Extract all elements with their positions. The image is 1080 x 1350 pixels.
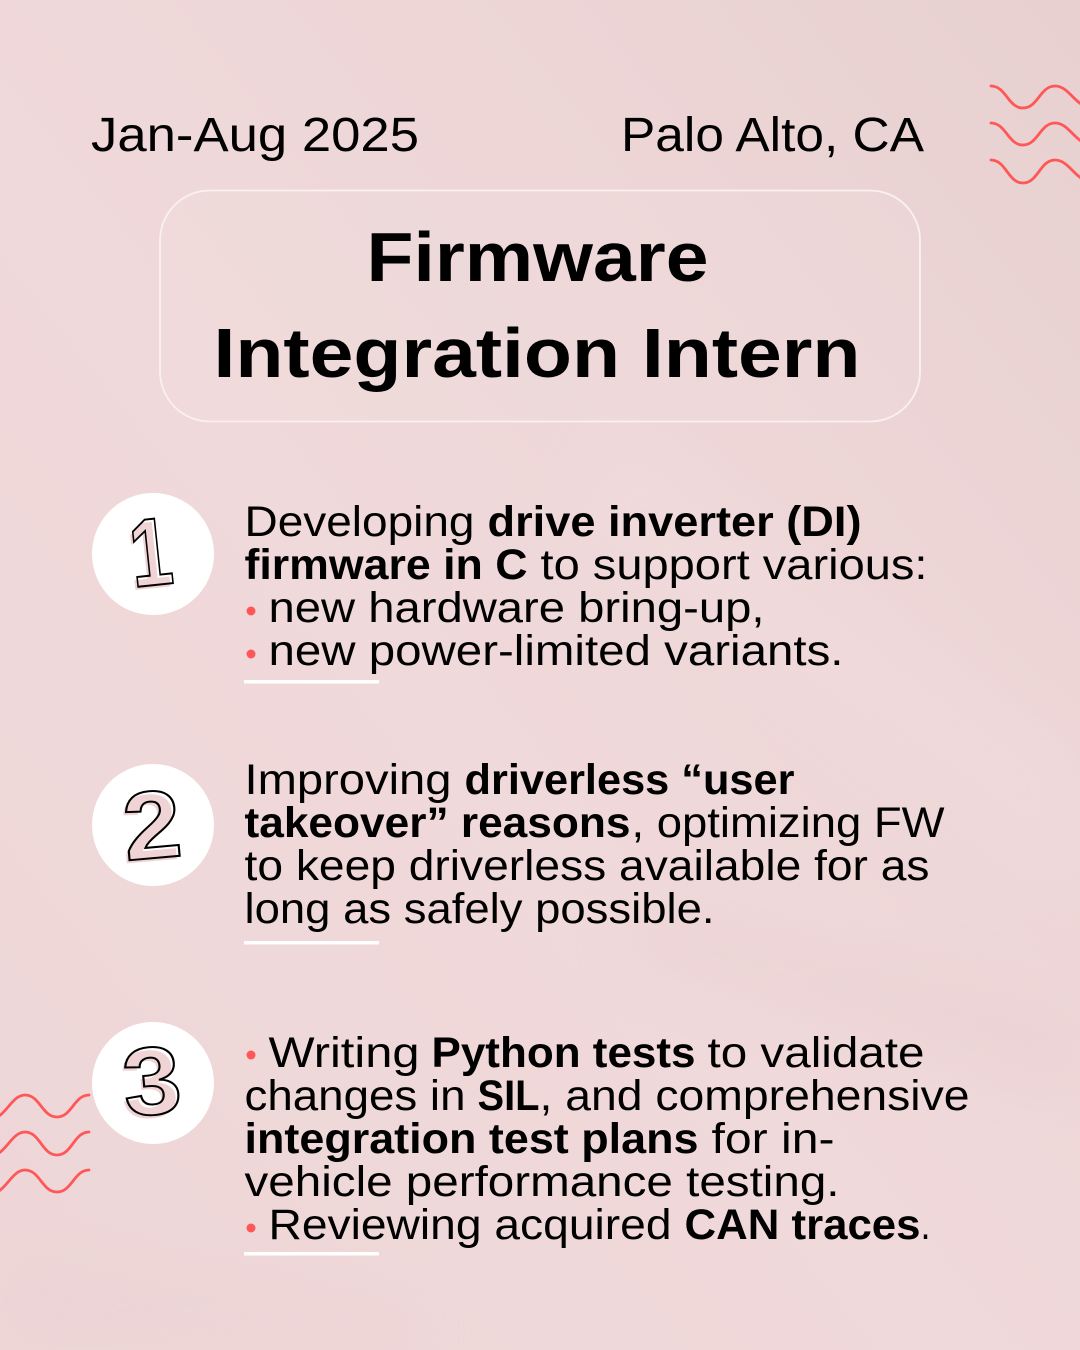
number badge 2: 2 [118,770,186,881]
text block 1: drive inverter (DI) [488,498,862,546]
number badge 3: 3 [116,1029,183,1141]
text block 3: CAN traces [684,1201,920,1249]
number badge 3 [92,1022,214,1144]
number badge 1: 1 [124,497,177,608]
date: Jan-Aug 2025 [91,109,419,162]
text block 2: takeover” reasons [244,799,630,847]
text block 1: firmware in C [244,541,528,589]
text block 3: , and comprehensive [540,1072,970,1120]
decorative waves top right [991,86,1080,183]
text block 2: long as safely possible. [244,885,714,933]
text block 3: Python tests [432,1029,696,1077]
text block 3: SIL [478,1072,540,1120]
text block 2: driverless “user [464,756,795,804]
number badge 2: 2 [116,773,183,885]
location: Palo Alto, CA [621,109,924,162]
text block 1: Developing [244,498,474,546]
text block 3: vehicle performance testing. [244,1158,840,1206]
text block 1 [244,498,928,684]
number badge 1 [92,493,214,615]
text block 1: to support various: [540,541,928,589]
text block 2: , optimizing FW [632,799,945,847]
text block 2: to keep driverless available for as [244,842,930,890]
text block 3 [244,1029,970,1256]
number badge 1: 1 [122,501,175,611]
title box: Integration Intern [214,314,860,392]
text block 3: for in- [712,1115,834,1163]
text block 3: changes in [244,1072,466,1120]
title box: Firmware [366,218,708,296]
number badge 3: 3 [118,1026,185,1137]
title box [160,190,920,422]
decorative waves bottom left [0,1095,89,1192]
number badge 2 [92,764,214,886]
text block 3: Writing [268,1029,420,1077]
text block 2 [244,756,945,944]
text block 1: new hardware bring-up, [268,584,764,632]
text block 3: to validate [708,1029,924,1077]
text block 3: Reviewing acquired [268,1201,672,1249]
text block 1: new power-limited variants. [268,627,844,675]
text block 2: Improving [244,756,452,804]
text block 3: . [920,1201,930,1249]
text block 3: integration test plans [244,1115,698,1163]
